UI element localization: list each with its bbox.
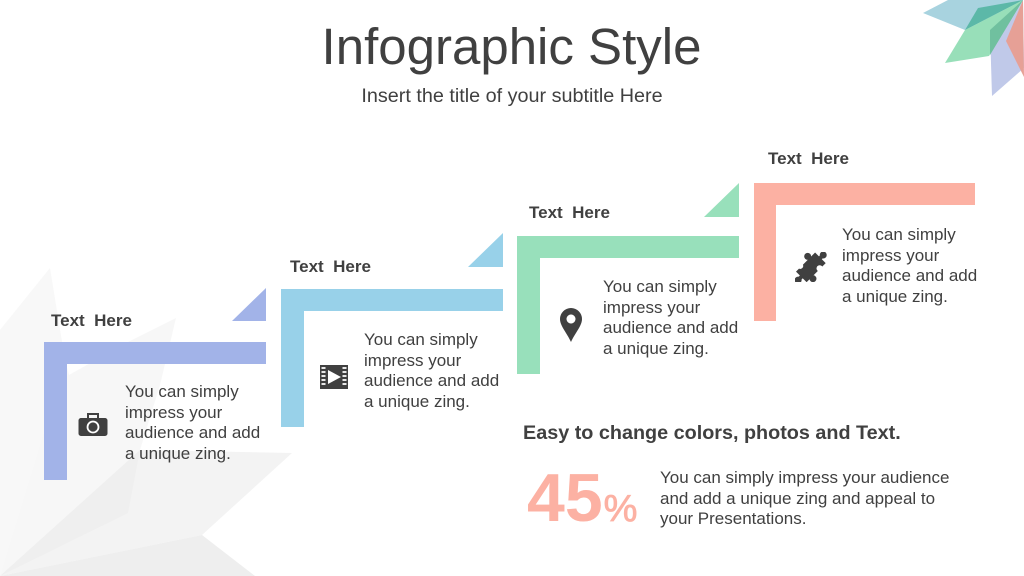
step 4 body: a unique zing. (842, 286, 948, 306)
step 2 body: You can simply (364, 330, 478, 349)
step 4 body: impress your (842, 246, 939, 264)
stat description: You can simply impress your audience (660, 468, 949, 487)
step 1 (44, 288, 266, 480)
step 2 body (364, 330, 499, 410)
step 2 body: audience and add (364, 371, 499, 390)
subtitle: Insert the title of your subtitle Here (361, 85, 663, 107)
step 2 heading: Text Here (290, 257, 371, 276)
step 1 body: a unique zing. (125, 444, 231, 462)
step 1 body: impress your (125, 402, 222, 422)
step 3 body: You can simply (603, 277, 717, 296)
stat: 45 percent: 45% (527, 460, 637, 536)
step 1 body: You can simply (125, 382, 239, 401)
step 4 heading: Text Here (768, 149, 849, 168)
step 3 icon: map pin (560, 308, 582, 342)
step 3 (517, 183, 739, 374)
step 3 body: audience and add (603, 318, 738, 337)
step 3 body (603, 277, 738, 358)
step 2 body: a unique zing. (364, 392, 470, 410)
step 3 arrow shape (517, 183, 739, 374)
step 3 heading: Text Here (529, 203, 610, 222)
step 2 icon: film play (320, 365, 348, 389)
step 2 arrow shape (281, 233, 503, 427)
step 4 body (842, 225, 977, 306)
step 4 arrow shape (754, 183, 975, 321)
step 2 (281, 233, 503, 427)
step 2 body: impress your (364, 350, 461, 370)
step 4 body: You can simply (842, 225, 956, 244)
step 3 body: impress your (603, 298, 700, 316)
step 4 body: audience and add (842, 266, 977, 285)
stat description: and add a unique zing and appeal to (660, 488, 935, 508)
step 1 body: audience and add (125, 423, 260, 442)
step 4 icon: puzzle piece (795, 252, 827, 282)
step 3 body: a unique zing. (603, 338, 709, 358)
stat description (660, 468, 949, 528)
stat description: your Presentations. (660, 509, 806, 528)
step 4 (754, 149, 977, 321)
step 1 body (125, 382, 260, 462)
callout: easy to change: Easy to change colors, photos and Text. (523, 422, 901, 444)
step 1 icon: camera (78, 413, 108, 436)
step 1 arrow shape (44, 288, 266, 480)
title: Infographic Style (322, 18, 701, 75)
step 1 heading: Text Here (51, 311, 132, 330)
